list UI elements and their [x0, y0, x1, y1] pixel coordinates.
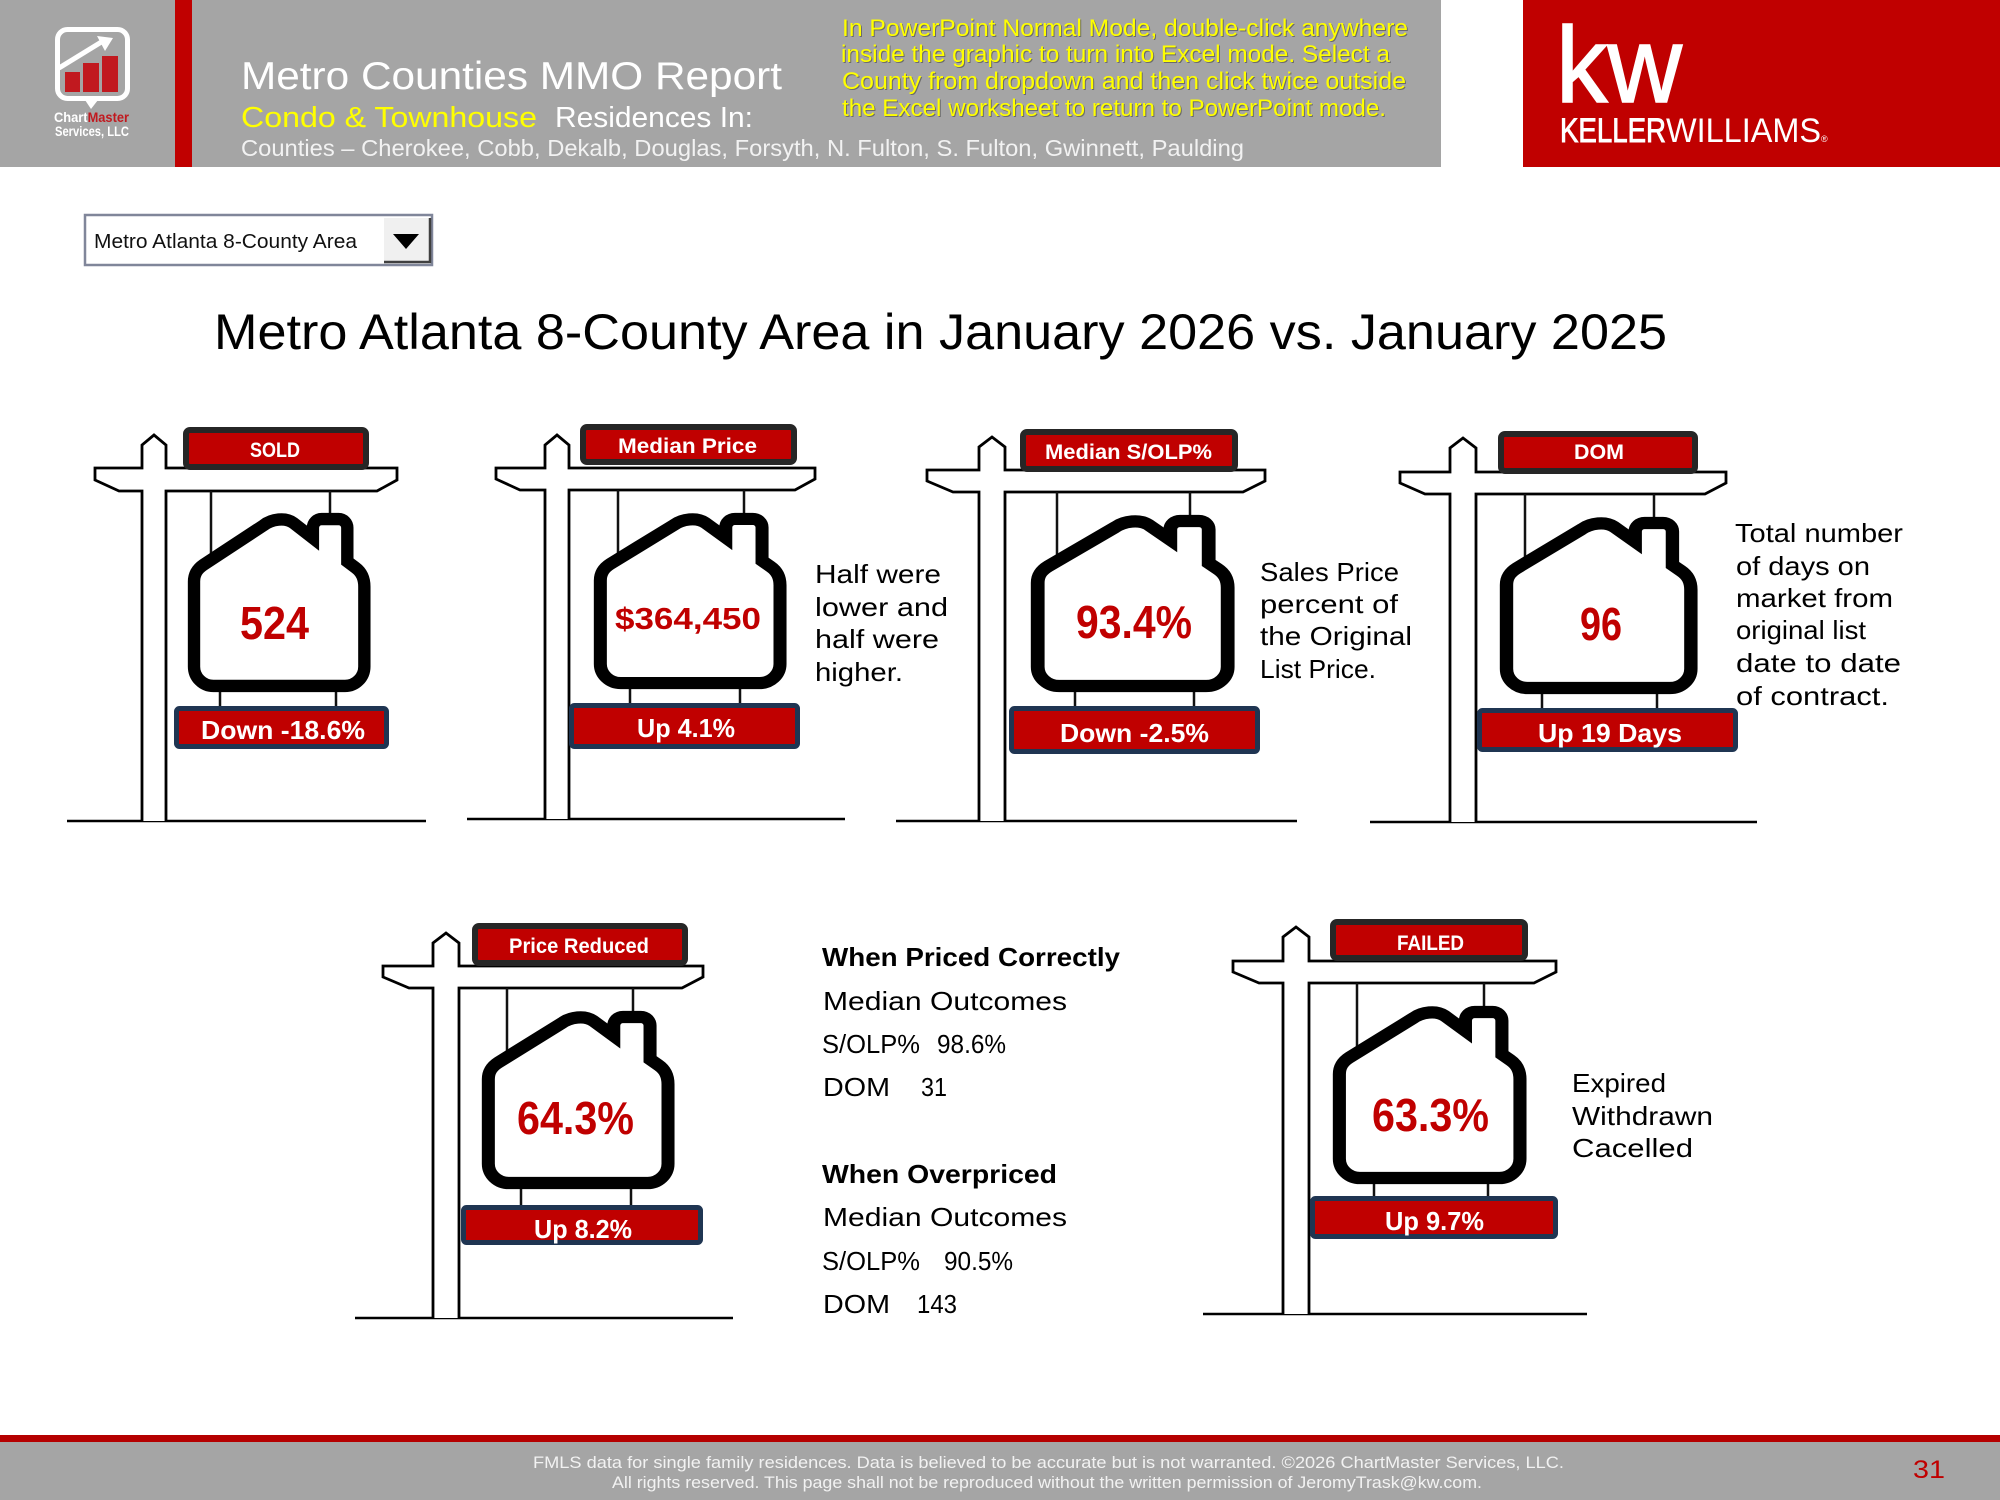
note: median price: half were	[815, 624, 939, 654]
note: DOM definition	[1735, 518, 1903, 711]
instructions: County from dropdown and then click twice outside	[842, 68, 1406, 95]
note: DOM definition: original list	[1736, 615, 1867, 645]
note: S/OLP definition	[1260, 557, 1412, 684]
panel: DOM sign: DOM	[1574, 441, 1624, 464]
text block: pricing outcomes: 143	[917, 1289, 957, 1319]
note: median price: Half were	[815, 559, 941, 589]
report title: Metro Counties MMO Report	[241, 55, 782, 98]
note: median price: lower and	[815, 592, 948, 622]
note: median price	[815, 559, 948, 687]
text block: pricing outcomes: Median Outcomes	[823, 986, 1067, 1016]
panel: Price Reduced sign	[355, 926, 733, 1318]
subtitle: residence type: Residences In:	[555, 102, 753, 134]
text block: pricing outcomes: When Priced Correctly	[822, 942, 1121, 972]
value: 63.3%: 63.3%	[1372, 1089, 1489, 1141]
instructions	[841, 15, 1408, 122]
Keller Williams logo panel: WILLIAMS	[1666, 112, 1821, 150]
icon: ChartMaster logo: Services, LLC	[55, 123, 129, 139]
change: Up 19 Days: Up 19 Days	[1538, 718, 1682, 748]
icon: ChartMaster logo: ChartMaster	[54, 109, 129, 125]
Keller Williams logo panel: kw	[1556, 4, 1683, 125]
note: failed listing types: Withdrawn	[1572, 1101, 1713, 1131]
value: 524: 524	[240, 597, 309, 649]
value: 93.4%: 93.4%	[1076, 596, 1192, 648]
change: Down -2.5%: Down -2.5%	[1060, 718, 1209, 748]
text block: pricing outcomes: DOM	[823, 1072, 890, 1102]
value: $364,450: $364,450	[615, 601, 761, 636]
note: DOM definition: Total number	[1735, 518, 1903, 548]
note: failed listing types	[1572, 1068, 1713, 1163]
text block: pricing outcomes	[822, 942, 1121, 1319]
subtitle: residence type	[241, 102, 753, 134]
value: 64.3%: 64.3%	[517, 1092, 634, 1144]
panel: SOLD sign	[67, 430, 426, 821]
county dropdown: Metro Atlanta 8-County Area	[94, 231, 358, 253]
text block: pricing outcomes: 90.5%	[944, 1246, 1013, 1276]
panel: DOM sign	[1370, 434, 1757, 822]
instructions: the Excel worksheet to return to PowerPoint mode.	[842, 95, 1386, 122]
change: Up 9.7%: Up 9.7%	[1385, 1206, 1484, 1236]
change: Up 4.1%: Up 4.1%	[637, 713, 735, 743]
text block: pricing outcomes: 98.6%	[937, 1029, 1006, 1059]
subtitle: residence type: Condo & Townhouse	[241, 102, 537, 134]
panel: Median Price sign: Median Price	[618, 435, 757, 458]
text block: pricing outcomes: Median Outcomes	[823, 1202, 1067, 1232]
note: DOM definition: of days on	[1736, 551, 1870, 581]
note: failed listing types: Expired	[1572, 1068, 1666, 1098]
note: S/OLP definition: List Price.	[1260, 654, 1376, 684]
note: DOM definition: of contract.	[1736, 681, 1889, 711]
note: failed listing types: Cacelled	[1572, 1133, 1693, 1163]
Keller Williams logo panel	[1523, 0, 2000, 167]
change: Down -18.6%: Down -18.6%	[201, 715, 365, 745]
counties list: Counties – Cherokee, Cobb, Dekalb, Douglas, Forsyth, N. Fulton, S. Fulton, Gwinnett, Paulding	[241, 135, 1244, 161]
footer	[0, 1435, 2000, 1500]
note: median price: higher.	[815, 657, 903, 687]
panel: FAILED sign: FAILED	[1397, 932, 1464, 955]
panel: Median S/OLP% sign: Median S/OLP%	[1045, 441, 1212, 464]
text block: pricing outcomes: S/OLP%	[822, 1029, 920, 1059]
panel: Price Reduced sign: Price Reduced	[509, 935, 649, 958]
text block: pricing outcomes: DOM	[823, 1289, 890, 1319]
text block: pricing outcomes: When Overpriced	[822, 1159, 1057, 1189]
county dropdown	[85, 215, 432, 265]
icon: ChartMaster logo	[54, 30, 129, 139]
Keller Williams logo panel: ®	[1821, 134, 1828, 144]
value: 96: 96	[1580, 598, 1622, 650]
Keller Williams logo panel: KELLER	[1560, 112, 1666, 150]
note: DOM definition: market from	[1736, 583, 1893, 613]
note: S/OLP definition: percent of	[1260, 589, 1399, 619]
text block: pricing outcomes: 31	[921, 1072, 947, 1102]
change: Up 8.2%: Up 8.2%	[534, 1214, 632, 1244]
text block: pricing outcomes: S/OLP%	[822, 1246, 920, 1276]
panel: FAILED sign	[1203, 922, 1587, 1314]
panel: Median Price sign	[467, 427, 845, 819]
disclaimer	[533, 1453, 1564, 1492]
disclaimer: All rights reserved. This page shall not be reproduced without the written permission of JeromyTrask@kw.com.	[612, 1473, 1482, 1492]
panel: SOLD sign: SOLD	[250, 439, 300, 462]
note: S/OLP definition: Sales Price	[1260, 557, 1399, 587]
note: DOM definition: date to date	[1736, 648, 1901, 678]
panel: Median S/OLP% sign	[896, 432, 1297, 821]
page number: 31	[1913, 1456, 1945, 1484]
note: S/OLP definition: the Original	[1260, 621, 1412, 651]
instructions: inside the graphic to turn into Excel mode. Select a	[841, 41, 1391, 68]
disclaimer: FMLS data for single family residences. Data is believed to be accurate but is not warranted. ©2026 ChartMaster Services, LLC.	[533, 1453, 1564, 1472]
instructions: In PowerPoint Normal Mode, double-click anywhere	[842, 15, 1408, 42]
main heading: Metro Atlanta 8-County Area in January 2026 vs. January 2025	[214, 304, 1667, 360]
header banner	[0, 0, 1441, 167]
